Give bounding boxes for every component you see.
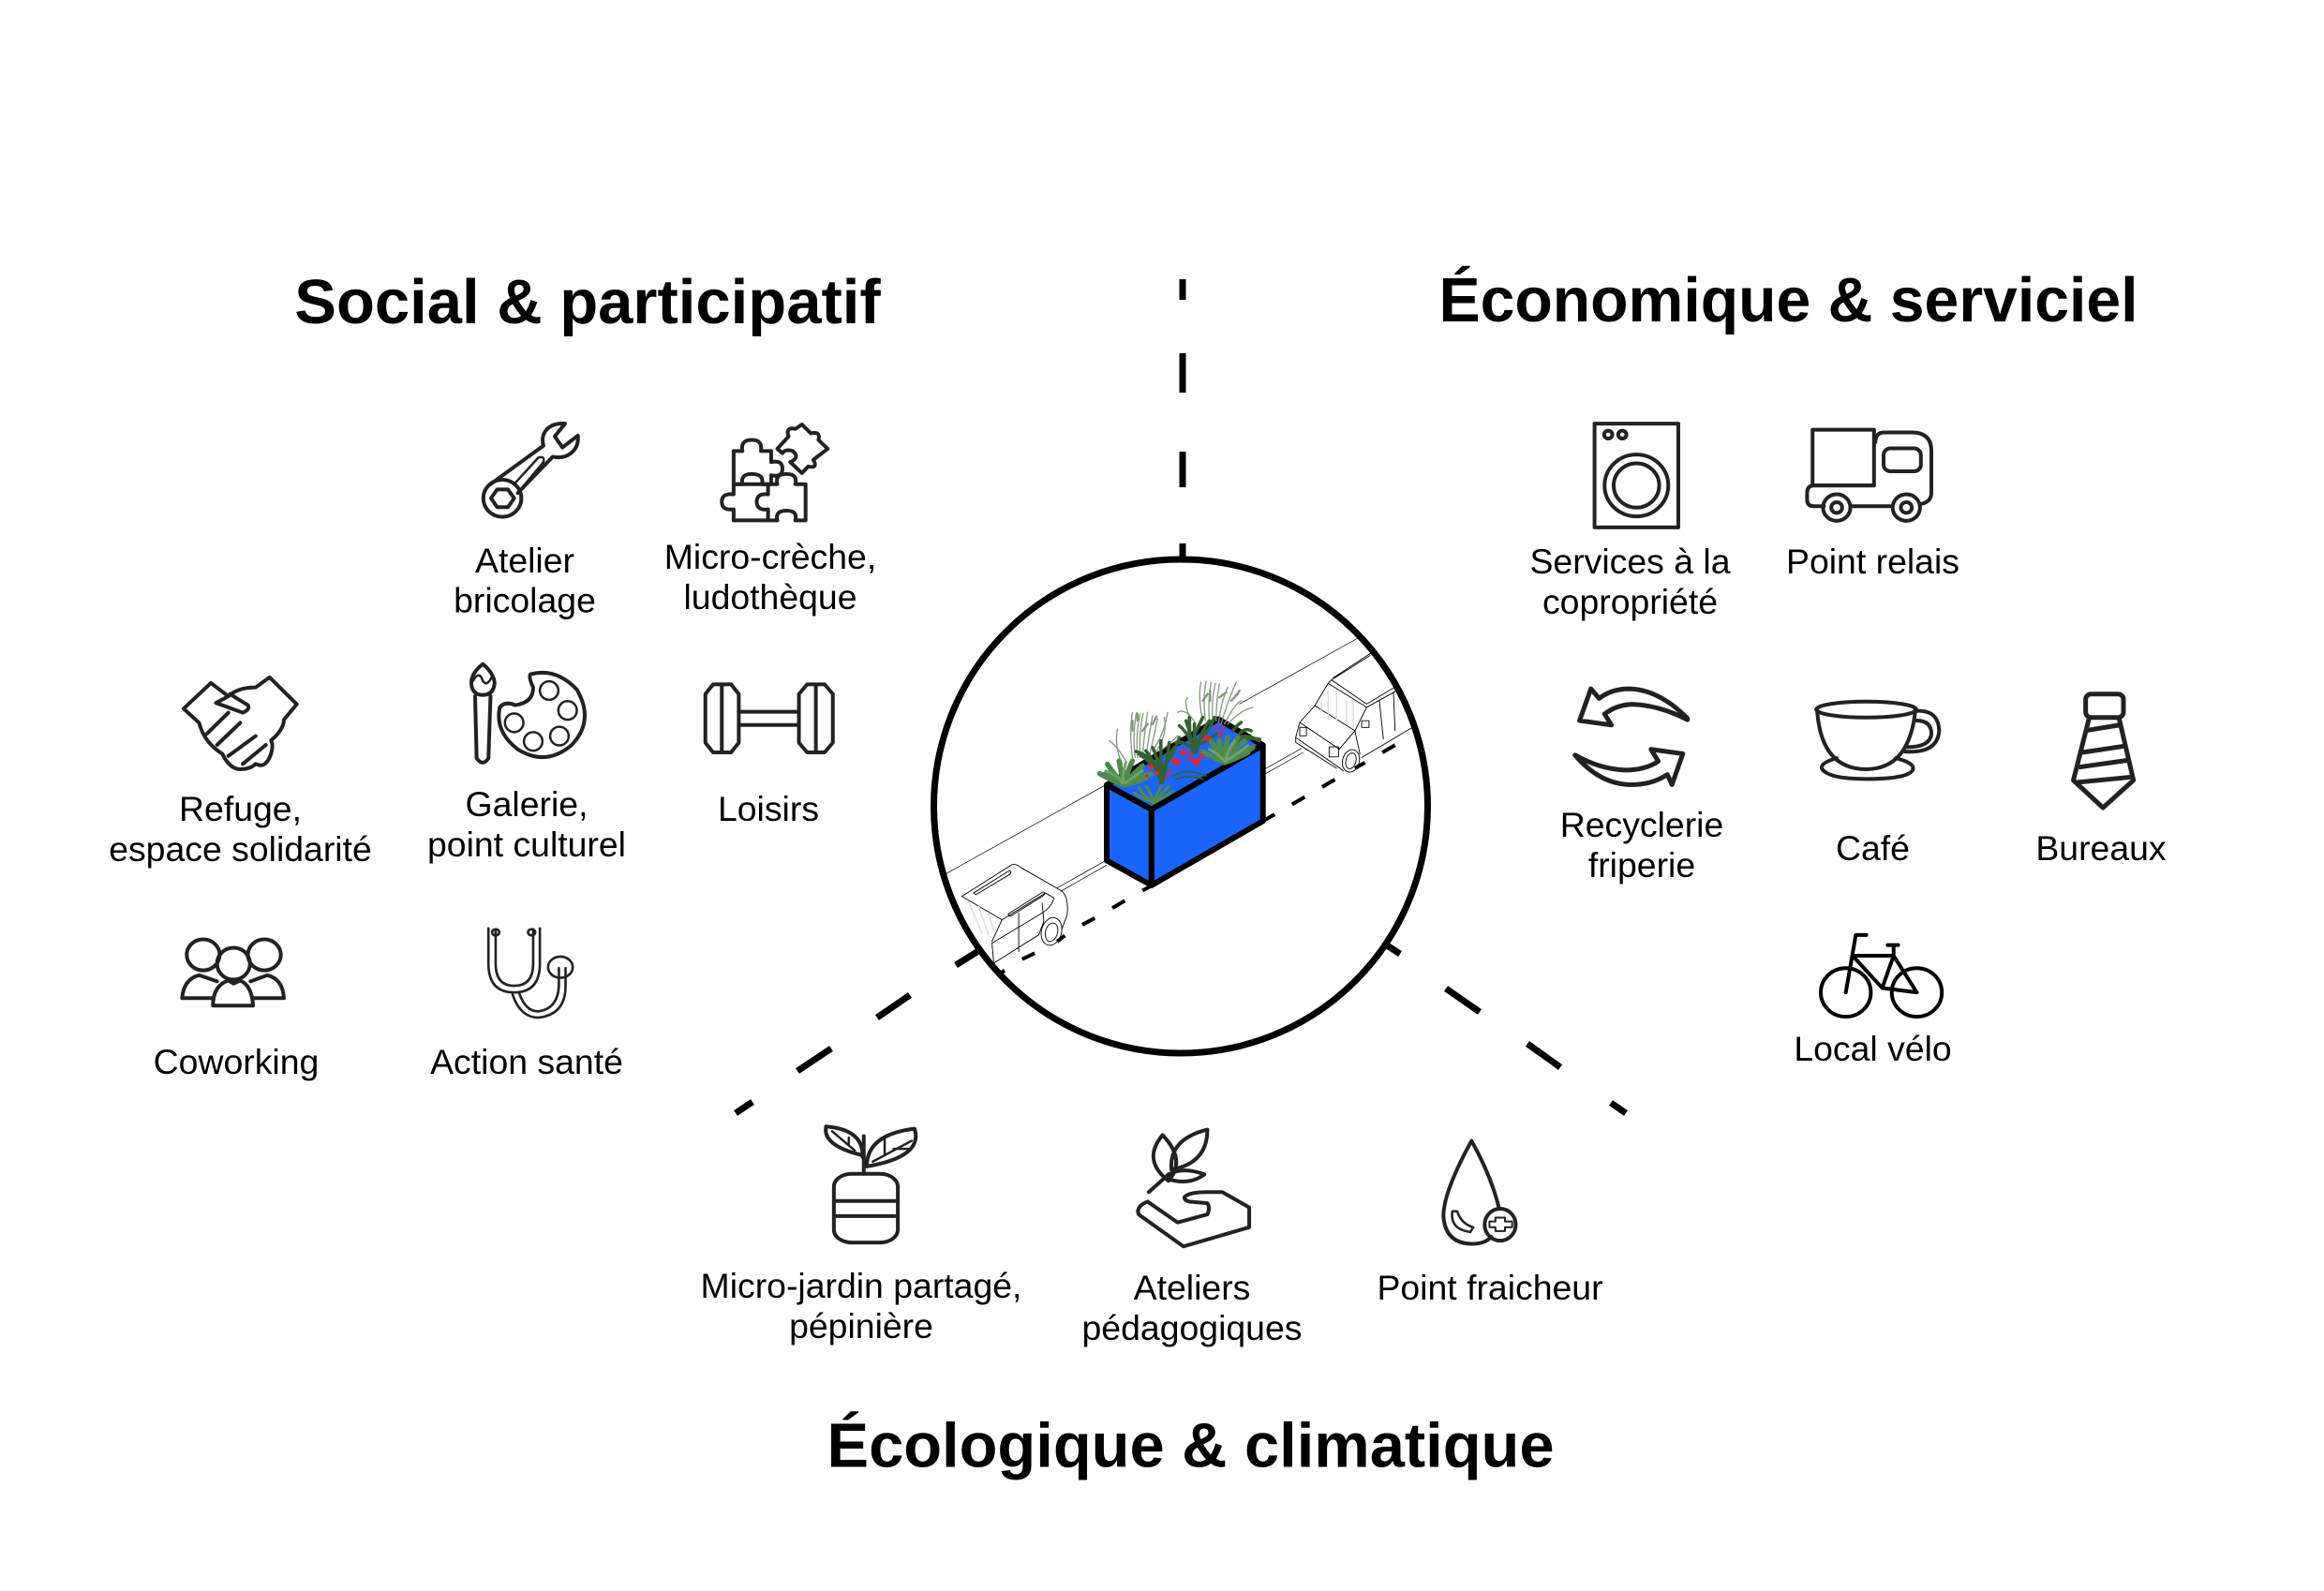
label: Galerie,: [466, 784, 588, 824]
label: bricolage: [454, 581, 596, 620]
road centre dashes: [997, 745, 1395, 975]
van: [1296, 653, 1413, 774]
item: services: [1529, 424, 1731, 621]
item: point fraicheur: [1377, 1141, 1603, 1307]
panel: écologique: [701, 1126, 1603, 1347]
icon: people: [182, 940, 284, 1005]
icon: truck: [1807, 430, 1931, 521]
item: atelier bricolage: [454, 424, 596, 620]
label: Loisirs: [718, 789, 819, 828]
panel: économique: [1529, 424, 2167, 1068]
diagram: [111, 266, 2167, 1480]
item: micro-crèche: [664, 424, 876, 617]
label: Micro-crèche,: [664, 537, 876, 576]
title: Écologique & climatique: Écologique & climatique: [827, 1411, 1554, 1480]
item: café: [1816, 702, 1939, 868]
dashed divider: top: [1179, 279, 1186, 561]
icon: hand and leaf: [1138, 1130, 1249, 1246]
label: Point relais: [1786, 542, 1959, 581]
label: pédagogiques: [1082, 1308, 1302, 1347]
label: Refuge,: [179, 789, 302, 828]
item: galerie: [427, 664, 626, 864]
icon: wrench: [484, 424, 578, 517]
item: bureaux: [2035, 694, 2167, 868]
label: Coworking: [154, 1042, 319, 1081]
dashed divider: bottom left: [736, 951, 978, 1113]
label: Point fraicheur: [1377, 1268, 1603, 1307]
icon: water drop: [1443, 1141, 1515, 1244]
label: Micro-jardin partagé,: [701, 1266, 1021, 1305]
label: Café: [1836, 828, 1910, 868]
icon: plant pot: [826, 1126, 916, 1242]
icon: puzzle: [722, 424, 827, 520]
panel: social: [109, 424, 876, 1081]
car: [961, 865, 1067, 963]
icon: handshake: [184, 677, 297, 769]
street lines and cars: [938, 622, 1413, 975]
icon: cup: [1816, 702, 1939, 779]
item: refuge: [109, 677, 372, 869]
leafy tufts: [1136, 718, 1259, 782]
label: Ateliers: [1134, 1268, 1250, 1307]
icon: brush and palette: [471, 664, 585, 763]
label: espace solidarité: [109, 829, 372, 869]
icon: dumbbell: [706, 684, 833, 752]
icon: washing machine: [1595, 424, 1678, 528]
label: Local vélo: [1794, 1029, 1952, 1068]
road edges: [946, 638, 1358, 892]
item: micro-jardin: [701, 1126, 1021, 1346]
label: Recyclerie: [1560, 805, 1723, 844]
plants: [1099, 681, 1259, 803]
item: coworking: [154, 940, 319, 1081]
central illustration: street planter: [938, 622, 1413, 975]
icon: tie: [2074, 694, 2134, 808]
item: loisirs: [706, 684, 833, 828]
icon: bicycle: [1821, 935, 1942, 1017]
central circle outline: [933, 559, 1428, 1053]
icon: stethoscope: [488, 929, 573, 1018]
label: copropriété: [1542, 582, 1718, 621]
item: action santé: [430, 929, 623, 1081]
label: Bureaux: [2035, 828, 2167, 868]
label: Action santé: [430, 1042, 623, 1081]
blue planter box: [1107, 719, 1263, 885]
label: Services à la: [1529, 542, 1731, 581]
label: point culturel: [427, 825, 626, 864]
icon: recycle arrows: [1575, 689, 1688, 784]
tall grasses: [1109, 681, 1253, 765]
item: ateliers pédagogiques: [1082, 1130, 1302, 1347]
label: pépinière: [789, 1306, 933, 1346]
label: ludothèque: [683, 577, 857, 617]
title: Social & participatif: Social & participatif: [294, 267, 881, 337]
red flowers: [1145, 726, 1225, 779]
item: local vélo: [1794, 935, 1952, 1068]
label: Atelier: [475, 541, 574, 580]
dashed divider: bottom right: [1384, 944, 1626, 1113]
label: friperie: [1588, 845, 1695, 885]
item: point relais: [1786, 430, 1959, 581]
title: Économique & serviciel: Économique & serviciel: [1439, 265, 2138, 335]
item: recyclerie: [1560, 689, 1723, 885]
